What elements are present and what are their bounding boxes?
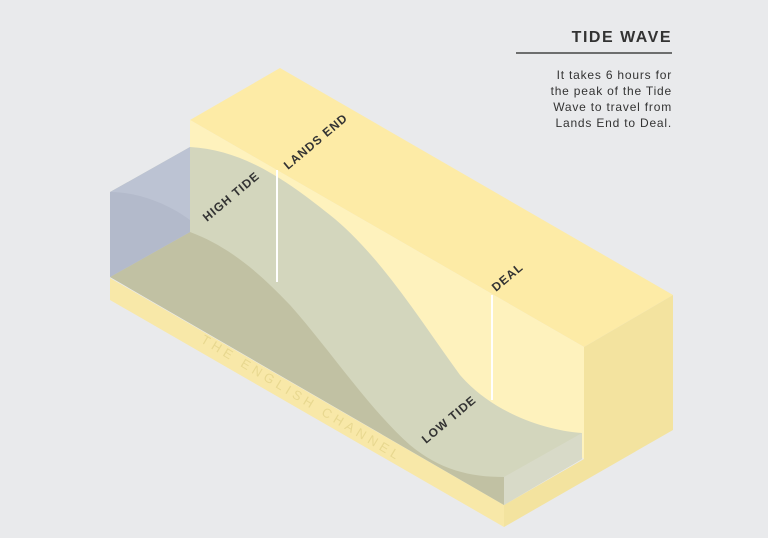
label: low tide: LOW TIDE bbox=[419, 393, 479, 446]
description: Wave to travel from bbox=[553, 100, 672, 114]
water: channel with tide wave bbox=[110, 147, 582, 505]
marker: Lands End line bbox=[276, 170, 278, 282]
description: the peak of the Tide bbox=[551, 84, 672, 98]
description: It takes 6 hours for bbox=[557, 68, 672, 82]
block: land bbox=[110, 68, 673, 527]
label: deal: DEAL bbox=[489, 260, 526, 294]
label: lands end: LANDS END bbox=[281, 111, 350, 172]
title: TIDE WAVE bbox=[572, 29, 672, 46]
marker: Deal line bbox=[491, 295, 493, 400]
description: Lands End to Deal. bbox=[556, 116, 672, 130]
label: high tide: HIGH TIDE bbox=[200, 169, 262, 224]
label: the english channel: THE ENGLISH CHANNEL bbox=[198, 332, 405, 464]
description bbox=[551, 68, 672, 130]
